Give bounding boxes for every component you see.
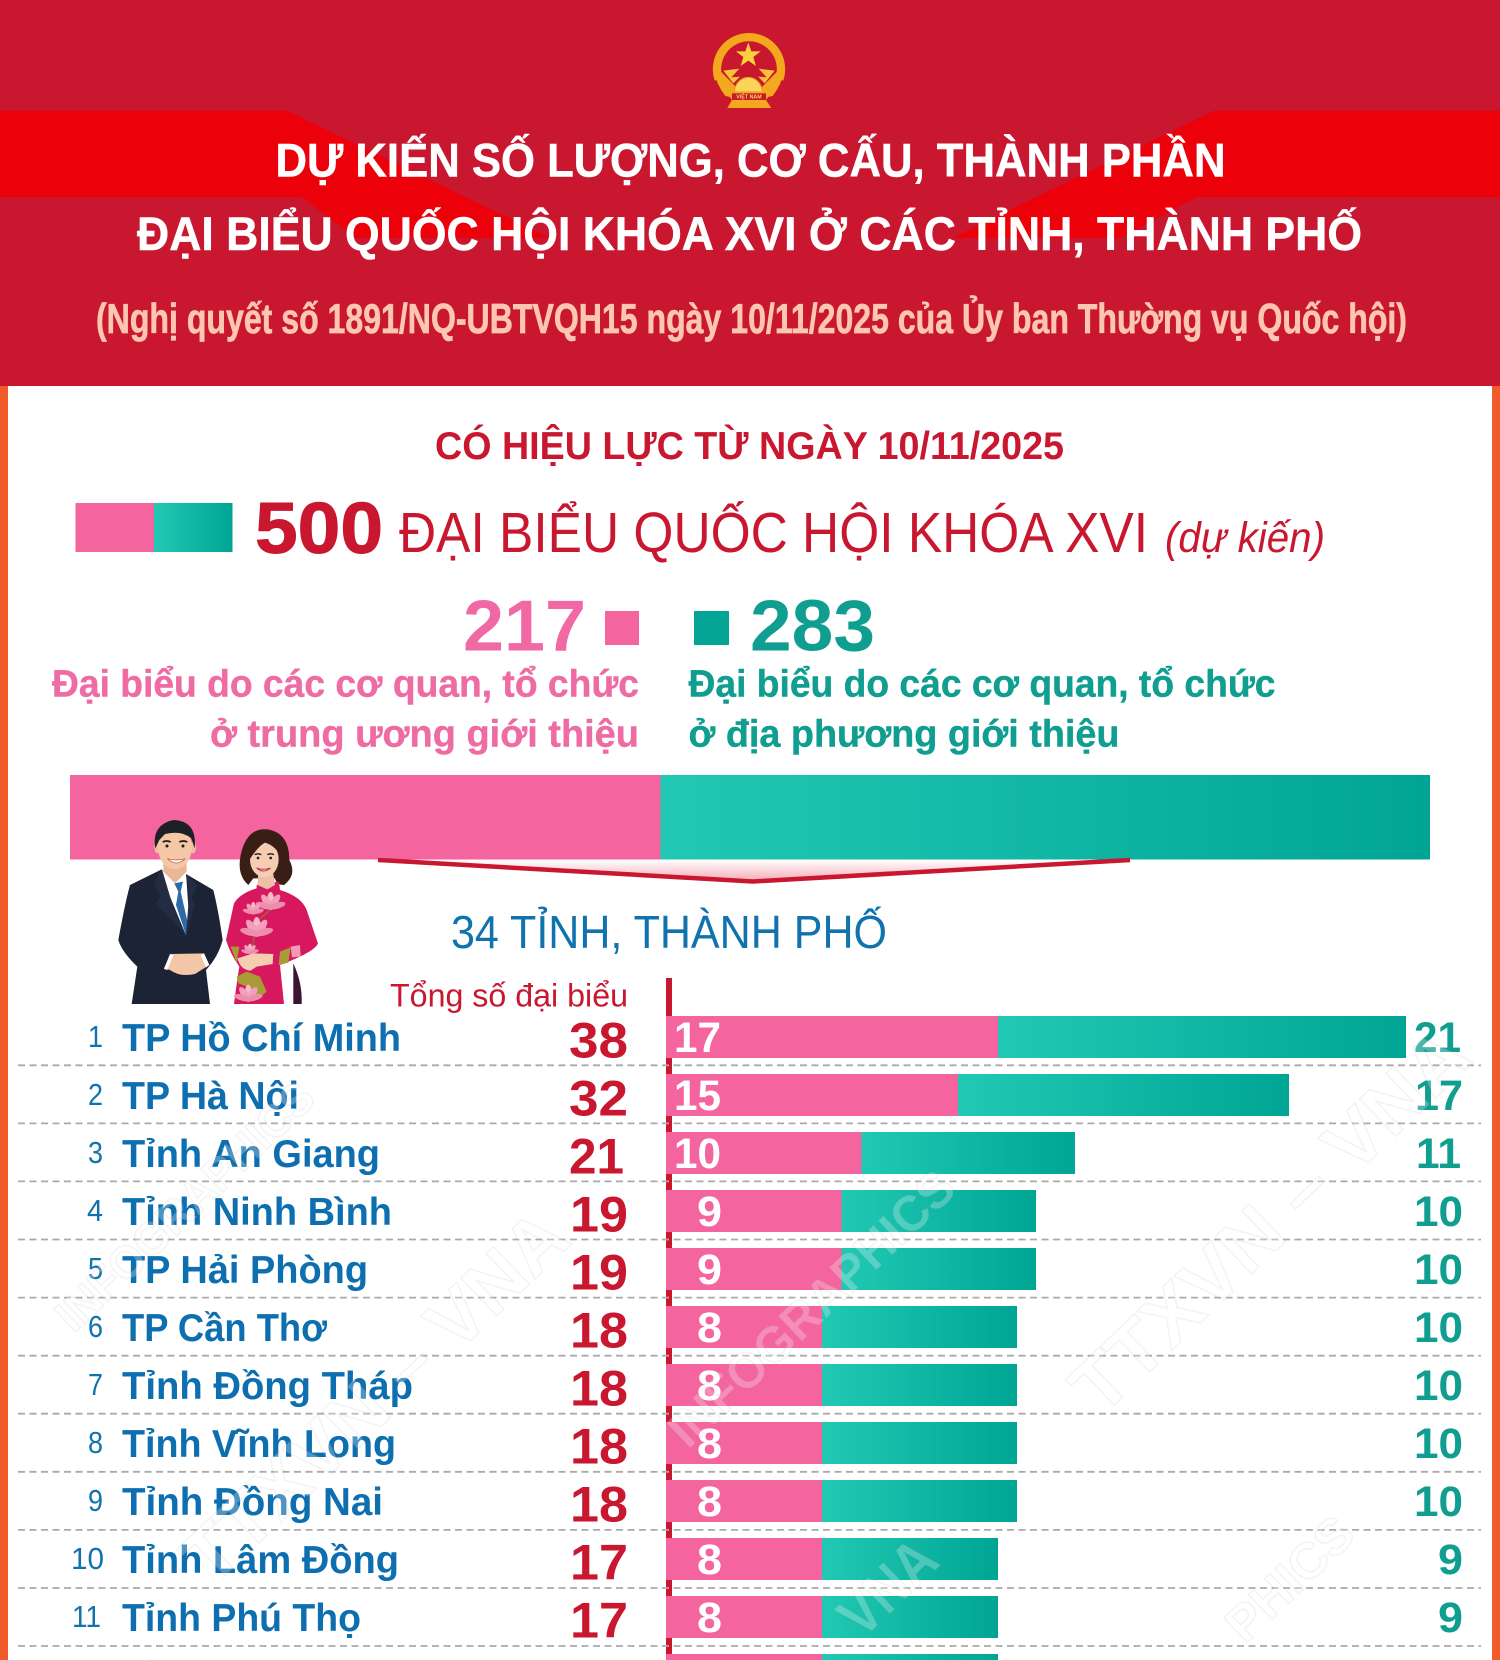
row 11 (72, 1592, 1463, 1648)
watermarks: PHICS (1214, 1505, 1365, 1653)
row 5 (88, 1244, 1463, 1300)
bar (666, 1538, 998, 1580)
name: Tỉnh Đồng Tháp (122, 1365, 413, 1408)
values (697, 1478, 1463, 1526)
title line 2: ĐẠI BIỂU QUỐC HỘI KHÓA XVI Ở CÁC TỈNH, THÀNH PHỐ (137, 207, 1362, 260)
values: 8 (697, 1362, 722, 1410)
funnel arrow (378, 860, 1130, 882)
total: 19 (570, 1244, 628, 1300)
watermarks: TTXVN – VNA (1054, 1012, 1487, 1430)
number 500: 500 (255, 489, 383, 569)
row 7: 7 (88, 1367, 103, 1402)
bar (666, 1074, 1289, 1116)
teal square (694, 611, 729, 645)
watermarks: INFOGRAPHICS (45, 1071, 325, 1341)
total: 18 (570, 1302, 628, 1358)
row 8: 8 (88, 1425, 103, 1460)
values (697, 1536, 1463, 1584)
values (697, 1420, 1463, 1468)
name: Tỉnh Lâm Đồng (122, 1539, 399, 1582)
local description line 2: ở địa phương giới thiệu (688, 714, 1120, 756)
total: 32 (569, 1070, 628, 1126)
local description line 1: Đại biểu do các cơ quan, tổ chức (688, 664, 1276, 706)
row 3 (88, 1128, 1461, 1184)
row 8 (88, 1418, 1463, 1474)
number 217: 217 (463, 586, 586, 666)
legend swatch teal (154, 503, 232, 552)
values: 8 (697, 1594, 722, 1642)
central description line 2: ở trung ương giới thiệu (210, 714, 639, 756)
values: 10 (1414, 1246, 1463, 1294)
watermarks: TTXVN – VNA (165, 1193, 585, 1600)
bar (666, 1248, 1036, 1290)
values: 10 (1414, 1188, 1463, 1236)
bar (666, 1364, 1017, 1406)
row 5: 5 (88, 1251, 103, 1286)
row 9: 9 (88, 1483, 103, 1518)
values: 8 (697, 1420, 722, 1468)
row 7 (88, 1360, 1463, 1416)
values (674, 1072, 1463, 1120)
values: 17 (1415, 1072, 1463, 1120)
row 2 (88, 1070, 1463, 1126)
row 3: 3 (88, 1135, 103, 1170)
name: TP Hải Phòng (122, 1249, 368, 1292)
row 10 (71, 1534, 1463, 1590)
values (697, 1304, 1463, 1352)
legend swatch pink (76, 503, 154, 552)
watermarks: INFOGRAPHICS (657, 1159, 966, 1458)
total: 18 (570, 1476, 628, 1532)
total: 21 (569, 1128, 624, 1184)
total: 19 (570, 1186, 628, 1242)
row 2: 2 (88, 1077, 103, 1112)
icon: national emblem: VIỆT NAM (736, 93, 762, 101)
column heading: total delegates: Tổng số đại biểu (390, 978, 628, 1014)
name: TP Hà Nội (122, 1075, 299, 1118)
values (697, 1246, 1463, 1294)
summary headline: 500 delegates (76, 489, 1325, 569)
values (674, 1130, 1461, 1178)
row 11: 11 (72, 1599, 101, 1634)
bar (666, 1306, 1017, 1348)
title line 1: DỰ KIẾN SỐ LƯỢNG, CƠ CẤU, THÀNH PHẦN (276, 134, 1226, 186)
total: 17 (570, 1534, 628, 1590)
row 1: 1 (88, 1019, 103, 1054)
man (118, 820, 223, 1004)
row 1 (88, 1012, 1461, 1068)
bar (666, 1422, 1017, 1464)
number 283: 283 (750, 586, 875, 666)
local delegates block (688, 586, 1276, 756)
header left ribbon (0, 111, 550, 238)
bar (666, 1132, 1075, 1174)
values: 15 (674, 1072, 721, 1120)
headline text: ĐẠI BIỂU QUỐC HỘI KHÓA XVI (399, 500, 1148, 565)
watermarks: VNA (825, 1525, 951, 1649)
name: Tỉnh Phú Thọ (122, 1597, 361, 1640)
woman (226, 829, 318, 1004)
side border right (1492, 386, 1500, 1660)
effective date heading: CÓ HIỆU LỰC TỪ NGÀY 10/11/2025 (435, 424, 1064, 468)
values: 8 (697, 1304, 722, 1352)
values (674, 1014, 1461, 1062)
side border left (0, 386, 8, 1660)
row 4: 4 (87, 1193, 103, 1228)
values (697, 1362, 1463, 1410)
row 4 (87, 1186, 1463, 1242)
proportion bar (70, 775, 1430, 860)
name: Tỉnh Ninh Bình (122, 1191, 392, 1234)
name: Tỉnh Đồng Nai (122, 1481, 383, 1524)
total: 18 (570, 1360, 628, 1416)
name: Tỉnh Vĩnh Long (122, 1423, 396, 1466)
watermarks (45, 1012, 1487, 1653)
values: 10 (1414, 1362, 1463, 1410)
name: TP Hồ Chí Minh (122, 1017, 401, 1060)
values: 9 (697, 1188, 722, 1236)
bar (666, 1016, 1406, 1058)
row 10: 10 (71, 1541, 104, 1576)
total: 38 (569, 1012, 628, 1068)
bar (666, 1596, 998, 1638)
dự kiến note: (dự kiến) (1165, 514, 1325, 562)
row 12 (cut off by page edge) (72, 1650, 998, 1660)
pink square (605, 611, 639, 645)
values (697, 1188, 1463, 1236)
header right ribbon (952, 111, 1500, 238)
total: 17 (570, 1592, 628, 1648)
values (697, 1594, 1463, 1642)
header panel (0, 0, 1500, 386)
values: 21 (1414, 1014, 1461, 1062)
chart axis (666, 978, 672, 1660)
central description line 1: Đại biểu do các cơ quan, tổ chức (52, 664, 639, 706)
values: 9 (1438, 1536, 1463, 1584)
bar (666, 1190, 1036, 1232)
bar (666, 1480, 1017, 1522)
section heading: 34 provinces: 34 TỈNH, THÀNH PHỐ (451, 906, 887, 958)
values: 11 (1416, 1130, 1461, 1178)
name: TP Cần Thơ (122, 1307, 327, 1350)
values: 8 (697, 1536, 722, 1584)
values: 10 (1414, 1420, 1463, 1468)
values: 17 (674, 1014, 721, 1062)
values: 10 (1414, 1478, 1463, 1526)
row 6: 6 (88, 1309, 103, 1344)
bar (666, 1654, 998, 1660)
row 6 (88, 1302, 1463, 1358)
row 9 (88, 1476, 1463, 1532)
values: 9 (697, 1246, 722, 1294)
illustration: two delegates (118, 820, 318, 1004)
icon: national emblem (713, 37, 785, 108)
central delegates block (52, 586, 639, 756)
values: 8 (697, 1478, 722, 1526)
values: 10 (1414, 1304, 1463, 1352)
total: 18 (570, 1418, 628, 1474)
values: 9 (1438, 1594, 1463, 1642)
name: Tỉnh An Giang (122, 1133, 380, 1176)
values: 10 (674, 1130, 721, 1178)
